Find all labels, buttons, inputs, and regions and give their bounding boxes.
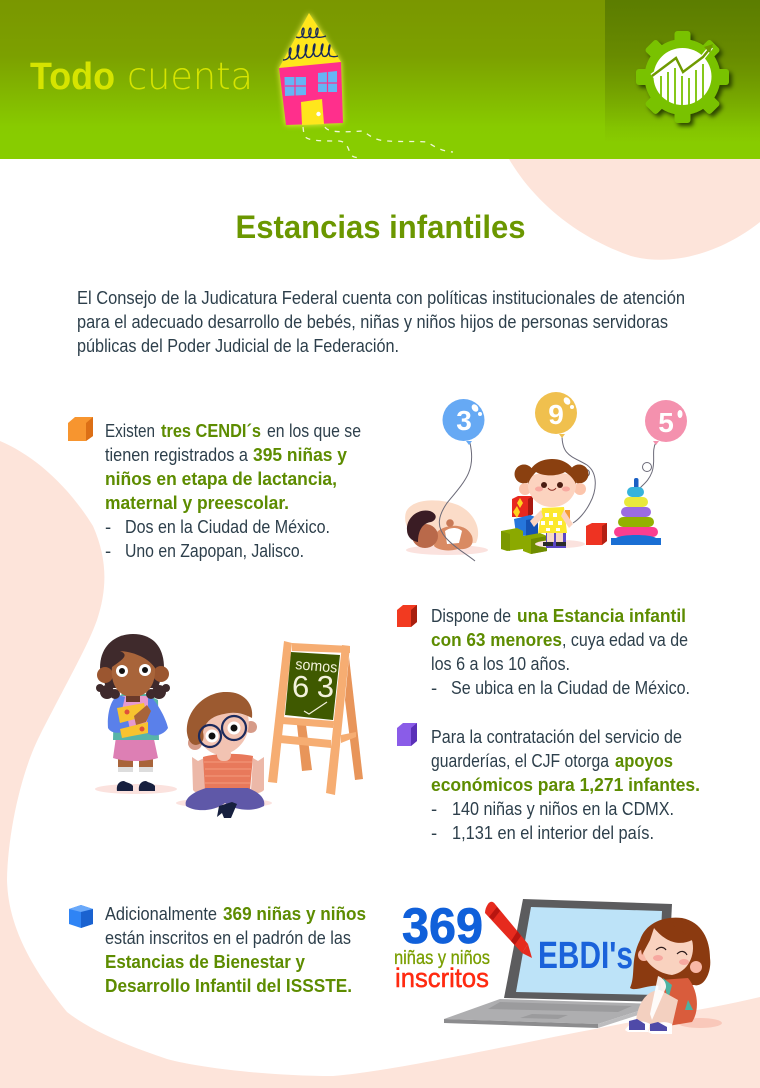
header title: cuenta (127, 55, 253, 98)
chalk writing: somos (295, 656, 338, 677)
icon: house (279, 13, 343, 125)
text block: CENDI: Uno en Zapopan, Jalisco. (125, 540, 304, 561)
text block: Estancia infantil: los 6 a los 10 años. (431, 653, 570, 674)
header title: Todo (30, 56, 115, 98)
text block: CENDI: - (105, 516, 111, 537)
text block: Estancia infantil: - (431, 677, 437, 698)
text block: apoyos economicos: - (431, 798, 437, 819)
text block: EBDI: Estancias de Bienestar y (105, 951, 306, 972)
text block: Estancia infantil: , cuya edad va de (562, 629, 688, 650)
icon: red cube (397, 605, 417, 627)
header title (30, 55, 253, 98)
text block: EBDI: 369 niñas y niños (223, 903, 366, 924)
text block: EBDI: Adicionalmente (105, 903, 217, 924)
text block: apoyos economicos: Para la contratación del servicio de (431, 726, 682, 747)
text block: Estancia infantil: una Estancia infantil (517, 605, 686, 626)
text block: CENDI: niños en etapa de lactancia, (105, 468, 337, 489)
icon: blue cube (69, 905, 93, 928)
balloon 9: 9 (548, 399, 564, 430)
icon: gear with growth chart (636, 31, 729, 123)
header band (0, 0, 760, 159)
text block: Estancia infantil: Se ubica en la Ciudad de México. (451, 677, 690, 698)
illustration: 369 inscritos with laptop (394, 898, 722, 1034)
toy blocks (501, 496, 607, 554)
text block: apoyos economicos: 140 niñas y niños en la CDMX. (452, 798, 674, 819)
text block: CENDI: Dos en la Ciudad de México. (125, 516, 330, 537)
balloon 3: 3 (456, 405, 472, 436)
chalk writing (292, 656, 338, 714)
figure 369: 369 (402, 898, 483, 954)
crayon (485, 902, 532, 958)
text block: CENDI: tienen registrados a (105, 444, 249, 465)
text block: CENDI: en los que se (267, 420, 361, 441)
text block: EBDI: están inscritos en el padrón de las (105, 927, 351, 948)
illustration: children and chalkboard (95, 634, 363, 818)
text block: apoyos economicos: guarderías, el CJF otorga (431, 750, 610, 771)
title: Estancias infantiles (236, 209, 526, 245)
balloon strings (439, 435, 656, 561)
balloon 3 (442, 399, 484, 445)
text block: EBDI (105, 903, 366, 996)
text block: CENDI: tres CENDI´s (161, 420, 261, 441)
background blob: left and bottom (0, 441, 760, 1088)
text block: apoyos economicos: apoyos (615, 750, 673, 771)
text block: Estancia infantil: Dispone de (431, 605, 511, 626)
shadow under girl (95, 784, 177, 794)
text block: apoyos economicos: 1,131 en el interior del país. (452, 822, 654, 843)
text block: CENDI: 395 niñas y (253, 444, 348, 465)
balloon 5: 5 (658, 407, 674, 438)
screen label: EBDI's (538, 935, 633, 977)
text block: CENDI (105, 420, 361, 561)
shadow under boy (176, 798, 272, 808)
intro paragraph (77, 287, 685, 356)
easel with chalkboard (268, 641, 363, 795)
girl with book (96, 634, 170, 791)
text block: Estancia infantil: con 63 menores (431, 629, 562, 650)
text block: apoyos economicos: - (431, 822, 437, 843)
text block: CENDI: maternal y preescolar. (105, 492, 289, 513)
label: niñas y niños: niñas y niños (394, 948, 490, 969)
girl with pigtails (514, 459, 588, 548)
text block: Estancia infantil (431, 605, 690, 698)
background blob: top right (509, 159, 760, 260)
girl with long hair (625, 918, 722, 1034)
icon: orange cube (68, 417, 93, 441)
baby (405, 500, 488, 555)
text block: EBDI: Desarrollo Infantil del ISSSTE. (105, 975, 352, 996)
text block: apoyos economicos (431, 726, 700, 843)
balloon 9 (535, 392, 577, 438)
label: inscritos: inscritos (395, 963, 489, 993)
intro paragraph: para el adecuado desarrollo de bebés, niñas y niños hijos de personas servidoras (77, 311, 668, 332)
chalk writing: 63 (292, 669, 334, 704)
icon: purple cube (397, 723, 417, 746)
dashed paths from the house (303, 127, 453, 158)
balloon 5 (645, 400, 687, 445)
text block: CENDI: Existen (105, 420, 155, 441)
intro paragraph: El Consejo de la Judicatura Federal cuenta con políticas institucionales de atención (77, 287, 685, 308)
ring stacking toy (611, 478, 661, 545)
boy with glasses (186, 692, 264, 818)
text block: apoyos economicos: económicos para 1,271 infantes. (431, 774, 700, 795)
intro paragraph: públicas del Poder Judicial de la Federación. (77, 335, 399, 356)
laptop (444, 899, 672, 1028)
text block: CENDI: - (105, 540, 111, 561)
illustration: balloons, baby, girl and toys (405, 392, 687, 561)
